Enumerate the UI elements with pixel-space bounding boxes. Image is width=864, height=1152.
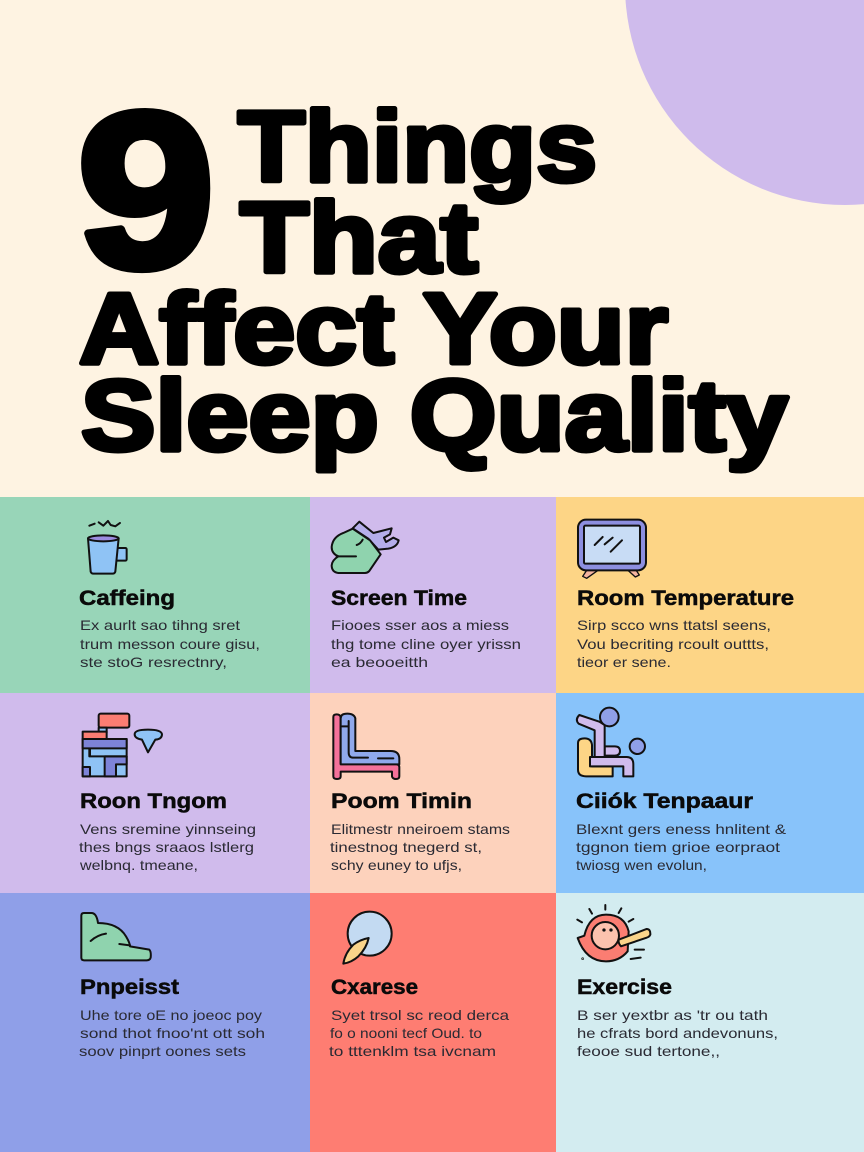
title: Sleep Quality xyxy=(81,360,788,472)
description: B ser yextbr as 'tr ou tath xyxy=(577,1007,768,1023)
heading: Caffeing xyxy=(79,587,175,610)
panel: pnpeisst xyxy=(0,893,310,1152)
description: Elitmestr nneiroem stams xyxy=(331,821,510,837)
description: schy euney to ufjs, xyxy=(331,857,462,873)
description: tinestnog tnegerd st, xyxy=(330,839,482,855)
heading: Screen Time xyxy=(331,587,467,610)
description: tieor er sene. xyxy=(577,654,671,670)
heading: Ciiók Tenpaaur xyxy=(576,790,753,813)
description: Syet trsol sc reod derca xyxy=(331,1007,509,1023)
heading: Pnpeisst xyxy=(80,976,179,999)
heading: Poom Timin xyxy=(331,790,472,813)
title: Affect Your xyxy=(79,273,668,385)
heading: Exercise xyxy=(577,976,672,999)
title xyxy=(77,67,788,472)
description: twiosg wen evolun, xyxy=(576,857,707,873)
description xyxy=(80,617,260,670)
panel: room tngom xyxy=(0,693,310,893)
title: That xyxy=(240,182,478,294)
description xyxy=(79,821,256,873)
description: ste stoG resrectnry, xyxy=(80,654,227,670)
description xyxy=(331,617,521,670)
description: fo o nooni tecf Oud. to xyxy=(330,1025,482,1041)
icon: circle with leaf xyxy=(343,912,392,964)
panel: room temperature xyxy=(556,497,864,693)
description: Uhe tore oE no joeoc poy xyxy=(80,1007,262,1023)
icon: pillow shape xyxy=(81,913,151,960)
icon: sun face with bar xyxy=(577,905,650,961)
panel: screen time xyxy=(310,497,556,693)
icon: sleeping head with cap xyxy=(332,522,399,573)
description: to tttenklm tsa ivcnam xyxy=(329,1043,496,1059)
icon: tv monitor xyxy=(578,520,646,578)
description: Blexnt gers eness hnlitent & xyxy=(576,821,787,837)
icon: colored blocks and funnel xyxy=(83,714,162,776)
panel: ciiok tenpaaur xyxy=(556,693,864,893)
decorative purple circle xyxy=(625,0,864,205)
big number 9: 9 xyxy=(77,67,215,315)
description: welbnq. tmeane, xyxy=(79,857,198,873)
panel: cxarese xyxy=(310,893,556,1152)
description xyxy=(330,821,510,873)
panel: poom timin xyxy=(310,693,556,893)
description: sond thot fnoo'nt ott soh xyxy=(80,1025,265,1041)
title: Things xyxy=(238,91,597,203)
description: Fiooes sser aos a miess xyxy=(331,617,509,633)
description: trum messon coure gisu, xyxy=(80,636,260,652)
description: ea beooeitth xyxy=(331,654,428,670)
description: Ex aurlt sao tihng sret xyxy=(80,617,240,633)
description: Sirp scco wns ttatsl seens, xyxy=(577,617,771,633)
icon: coffee cup with steam xyxy=(88,521,127,574)
description: Vou becriting rcoult outtts, xyxy=(577,636,769,652)
description: he cfrats bord andevonuns, xyxy=(577,1025,778,1041)
heading: Cxarese xyxy=(331,976,418,999)
heading: Roon Tngom xyxy=(80,790,227,813)
icon: bed xyxy=(333,714,399,779)
description: thes bngs sraaos lstlerg xyxy=(79,839,254,855)
description: thg tome cline oyer yrissn xyxy=(331,636,521,652)
description: feooe sud tertone,, xyxy=(577,1043,720,1059)
panel: caffeine xyxy=(0,497,310,693)
heading: Room Temperature xyxy=(577,587,794,610)
description xyxy=(577,1007,778,1059)
description xyxy=(329,1007,509,1059)
description xyxy=(79,1007,265,1059)
description: soov pinprt oones sets xyxy=(79,1043,246,1059)
description: Vens sremine yinnseing xyxy=(80,821,256,837)
description: tggnon tiem grioe eorpraot xyxy=(576,839,780,855)
description xyxy=(577,617,771,670)
icon: seated person xyxy=(577,708,645,776)
panel: exercise xyxy=(556,893,864,1152)
description xyxy=(576,821,787,873)
